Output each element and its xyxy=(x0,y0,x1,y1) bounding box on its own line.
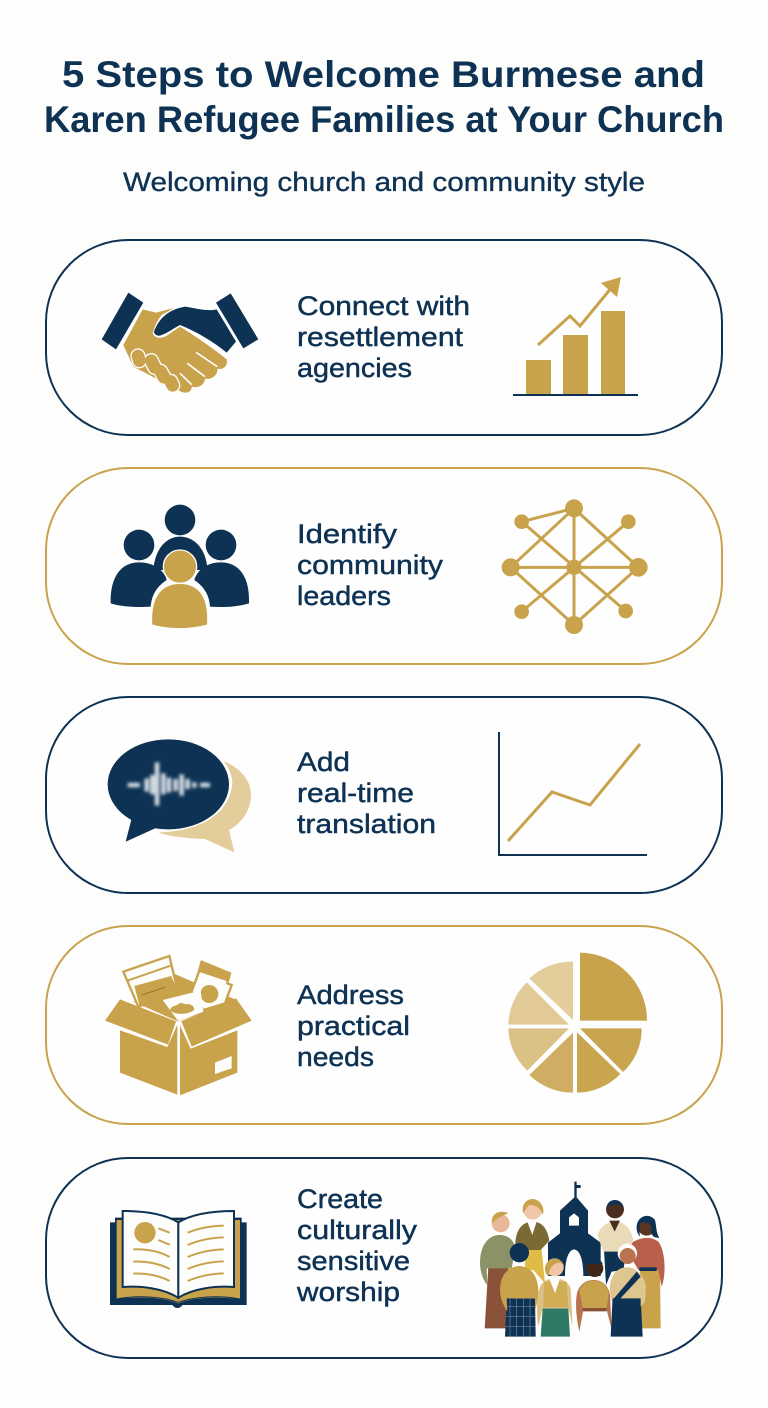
step 2 text: leaders xyxy=(297,581,391,611)
step 1 text xyxy=(297,291,470,383)
icon: network graph xyxy=(502,499,648,634)
icon: speech bubbles with waveform xyxy=(106,738,251,852)
back right woman xyxy=(638,1270,661,1328)
step 3 text: translation xyxy=(297,809,436,839)
chart: pie chart xyxy=(508,953,647,1093)
step 5 text: sensitive xyxy=(297,1246,410,1276)
back woman olive xyxy=(525,1250,545,1283)
step 4 text: Address xyxy=(297,980,404,1010)
panel: step 1 connect with resettlement agencies xyxy=(46,240,722,435)
step 5 text: Create xyxy=(297,1184,383,1214)
chart: rising bars with arrow xyxy=(513,277,638,395)
title xyxy=(44,54,724,140)
step 3 text: real-time xyxy=(297,778,414,808)
panel: step 5 create culturally sensitive worship xyxy=(46,1158,722,1358)
panel: step 3 add real-time translation xyxy=(46,697,722,893)
step 1 text: resettlement xyxy=(297,322,464,352)
icon: open box of supplies xyxy=(105,956,252,1095)
title: 5 Steps to Welcome Burmese and xyxy=(62,54,705,95)
illustration: congregation and church xyxy=(480,1182,665,1337)
step 2 text: Identify xyxy=(297,519,398,549)
step 4 text: practical xyxy=(297,1011,410,1041)
panel: step 4 address practical needs xyxy=(46,926,722,1124)
front boy xyxy=(576,1280,612,1332)
panel: step 2 identify community leaders xyxy=(46,468,722,664)
front left plaid skirt person xyxy=(505,1298,536,1337)
step 1 text: agencies xyxy=(297,353,412,383)
chart: line chart xyxy=(499,732,647,855)
step 2 text: community xyxy=(297,550,444,580)
icon: group of people xyxy=(111,505,249,629)
step 4 text xyxy=(297,980,410,1072)
icon: open book xyxy=(110,1211,247,1308)
step 4 text: needs xyxy=(297,1042,374,1072)
step 1 text: Connect with xyxy=(297,291,470,321)
step 5 text: worship xyxy=(296,1277,400,1307)
front center green skirt woman xyxy=(541,1308,570,1337)
church xyxy=(548,1182,601,1276)
icon: handshake xyxy=(102,293,258,393)
front elder with sash xyxy=(611,1297,643,1337)
title: Karen Refugee Families at Your Church xyxy=(44,99,724,140)
back man navy xyxy=(604,1250,627,1285)
step 5 text: culturally xyxy=(297,1215,418,1245)
step 3 text xyxy=(297,747,436,839)
step 3 text: Add xyxy=(297,747,350,777)
step 5 text xyxy=(296,1184,418,1307)
subtitle: Welcoming church and community style xyxy=(123,167,645,197)
back left woman xyxy=(485,1267,515,1328)
step 2 text xyxy=(297,519,444,611)
